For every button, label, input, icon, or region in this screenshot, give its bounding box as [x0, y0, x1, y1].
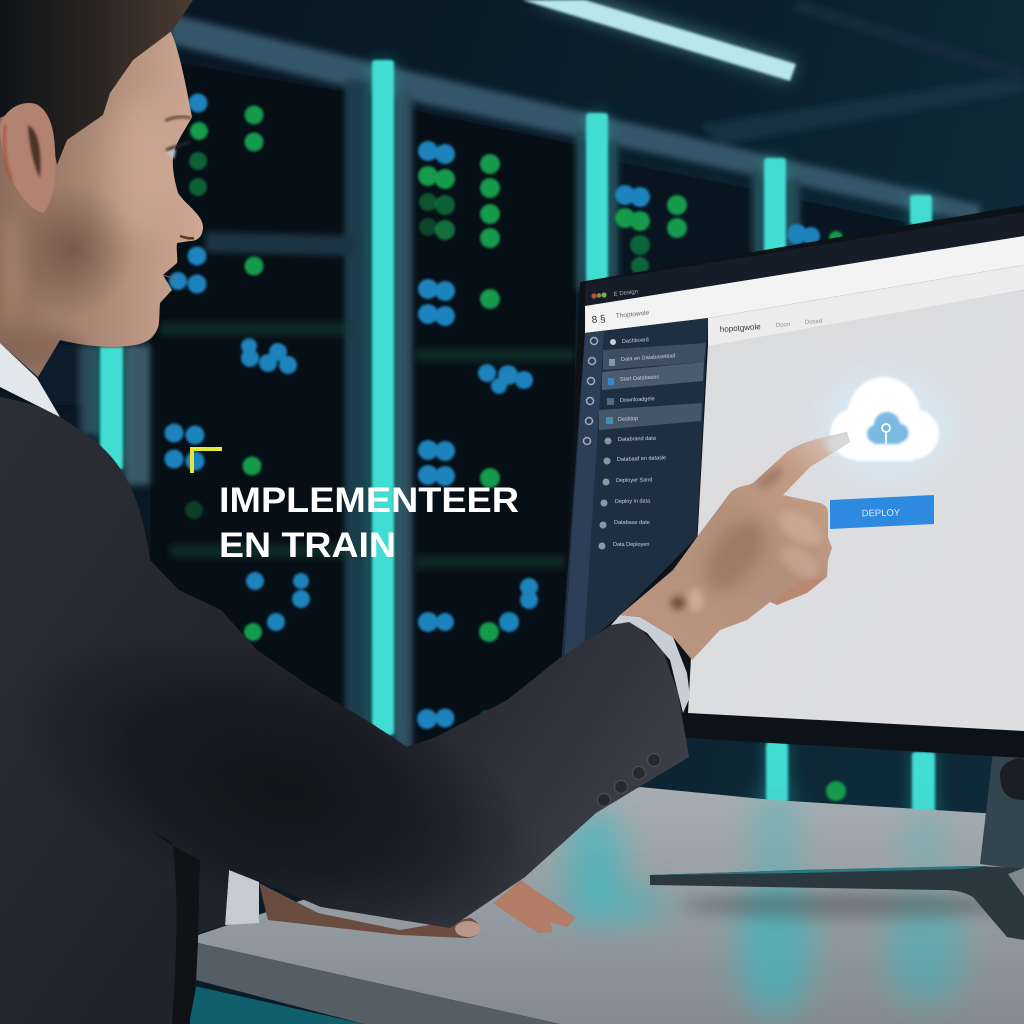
highlighted rows [599, 343, 706, 430]
server rack 4 [800, 200, 905, 290]
server rack 2 [412, 110, 578, 745]
row labels: Data en Databaseblad [621, 353, 676, 363]
browser title bar [585, 212, 1024, 306]
icon rail [564, 331, 604, 660]
hand shading [703, 518, 767, 592]
browser address bar [585, 236, 1024, 333]
browser address bar: 8 § [591, 314, 606, 326]
row labels: Downloadgele [620, 396, 655, 404]
server rack 1 [150, 58, 345, 720]
desk [190, 787, 1024, 1024]
eye and brow [165, 117, 191, 159]
main content area [688, 290, 1024, 731]
row labels: Data Deployen [613, 542, 649, 548]
content header tabs: hopotgwole [720, 322, 762, 334]
server rack 3 [618, 162, 756, 300]
neck and face [0, 30, 203, 377]
ceiling light strip [522, 0, 796, 82]
cloud icon [813, 367, 957, 483]
status lights: blue [164, 94, 820, 729]
cheek shadow [27, 194, 124, 306]
row labels: Start Databases [620, 374, 660, 383]
row labels [613, 337, 676, 548]
content header tabs: Dosed [805, 319, 822, 326]
row icons [598, 339, 616, 550]
row labels: Database date [614, 520, 650, 526]
mouth line [163, 275, 176, 279]
desk front edge [196, 943, 560, 1024]
title: IMPLEMENTEER [219, 481, 519, 520]
glowing teal light bars [100, 60, 935, 814]
monitor base shadow [680, 893, 1020, 917]
content header tabs: Doon [776, 322, 790, 329]
rack frames [40, 80, 800, 750]
rack frame beam [170, 14, 980, 224]
row labels: Dashboard [622, 337, 649, 345]
deploy button [830, 495, 934, 529]
pointing hand [620, 430, 852, 660]
title: EN TRAIN [219, 526, 396, 565]
browser address bar: Thoptowole [615, 309, 650, 320]
ear [0, 103, 55, 213]
row labels: Deployer Sand [616, 477, 652, 484]
row labels: Desktop [618, 416, 638, 423]
shirt cuff on desk [225, 870, 259, 925]
nostril [180, 236, 194, 238]
shirt collar [0, 343, 60, 417]
shirt cuff [611, 615, 690, 713]
monitor stand [650, 752, 1024, 940]
browser title bar: E Design [614, 289, 638, 298]
row labels: Databaaf en datasle [617, 455, 666, 463]
content header tabs [708, 265, 1024, 346]
status lights: green [185, 106, 846, 801]
monitor [561, 205, 1024, 758]
lower hand on desk [259, 880, 575, 938]
sidebar [561, 318, 708, 664]
deploy button: DEPLOY [862, 508, 901, 519]
corner accent [192, 449, 222, 473]
row labels: Deploy in data [615, 498, 651, 505]
jacket [0, 397, 689, 1024]
floor glow under desk [190, 985, 364, 1024]
monitor bezel [562, 205, 1024, 758]
jacket sleeve buttons [598, 754, 660, 806]
jacket fold shading [84, 679, 502, 1024]
desk teal reflections [560, 790, 965, 1015]
hair [0, 0, 193, 165]
row labels: Databrand data [618, 436, 657, 443]
title [219, 481, 519, 565]
